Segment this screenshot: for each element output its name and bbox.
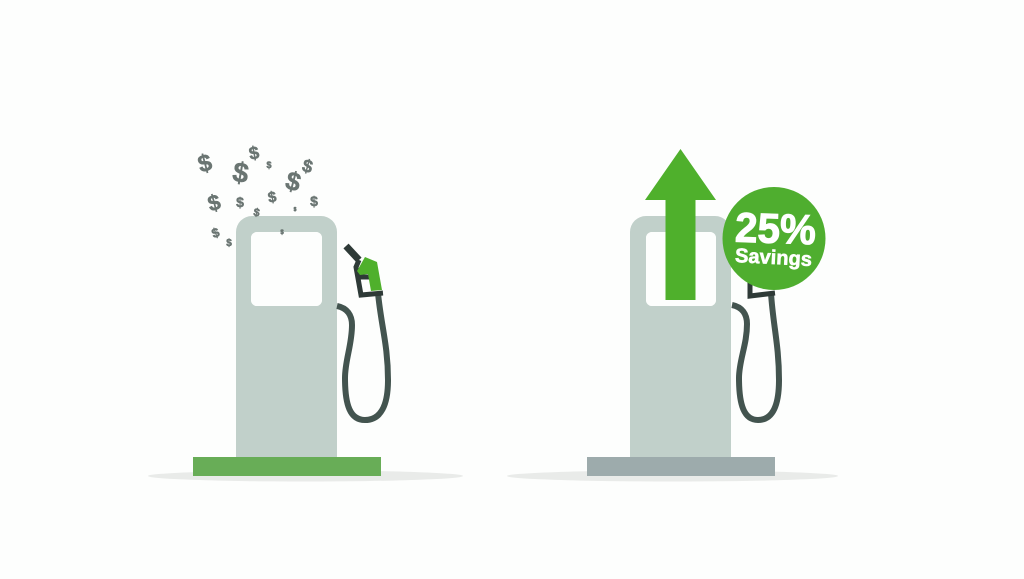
ground shadow left	[148, 470, 463, 482]
pump body left	[236, 216, 337, 458]
up arrow	[645, 149, 716, 300]
floating dollar signs: $	[267, 188, 278, 207]
floating dollar signs: $	[209, 224, 222, 241]
floating dollar signs: $	[266, 160, 272, 170]
badge value: 25%	[734, 204, 817, 253]
floating dollar signs: $	[252, 207, 261, 219]
floating dollar signs: $	[226, 238, 232, 249]
floating dollar signs: $	[282, 165, 305, 198]
nozzle right	[750, 282, 775, 296]
floating dollar signs: $	[294, 207, 297, 213]
floating dollar signs: $	[300, 155, 315, 177]
floating dollar signs: $	[280, 230, 284, 236]
green base	[193, 457, 381, 476]
nozzle left	[346, 246, 383, 295]
pump body right	[630, 216, 731, 458]
ground shadow right	[507, 470, 838, 482]
floating dollar signs	[195, 142, 318, 249]
floating dollar signs: $	[310, 193, 318, 209]
hose right	[732, 293, 779, 420]
floating dollar signs: $	[205, 189, 223, 216]
left panel: fuel pump losing money	[148, 142, 463, 482]
floating dollar signs: $	[195, 149, 216, 179]
badge label: Savings	[734, 245, 813, 271]
right panel: fuel pump with savings	[507, 149, 838, 482]
savings badge	[722, 187, 826, 290]
floating dollar signs: $	[236, 194, 244, 210]
grey base	[587, 457, 775, 476]
pump window right	[646, 232, 716, 306]
hose left	[337, 293, 388, 420]
pump window left	[251, 232, 322, 306]
floating dollar signs: $	[247, 142, 261, 164]
floating dollar signs: $	[230, 156, 251, 189]
